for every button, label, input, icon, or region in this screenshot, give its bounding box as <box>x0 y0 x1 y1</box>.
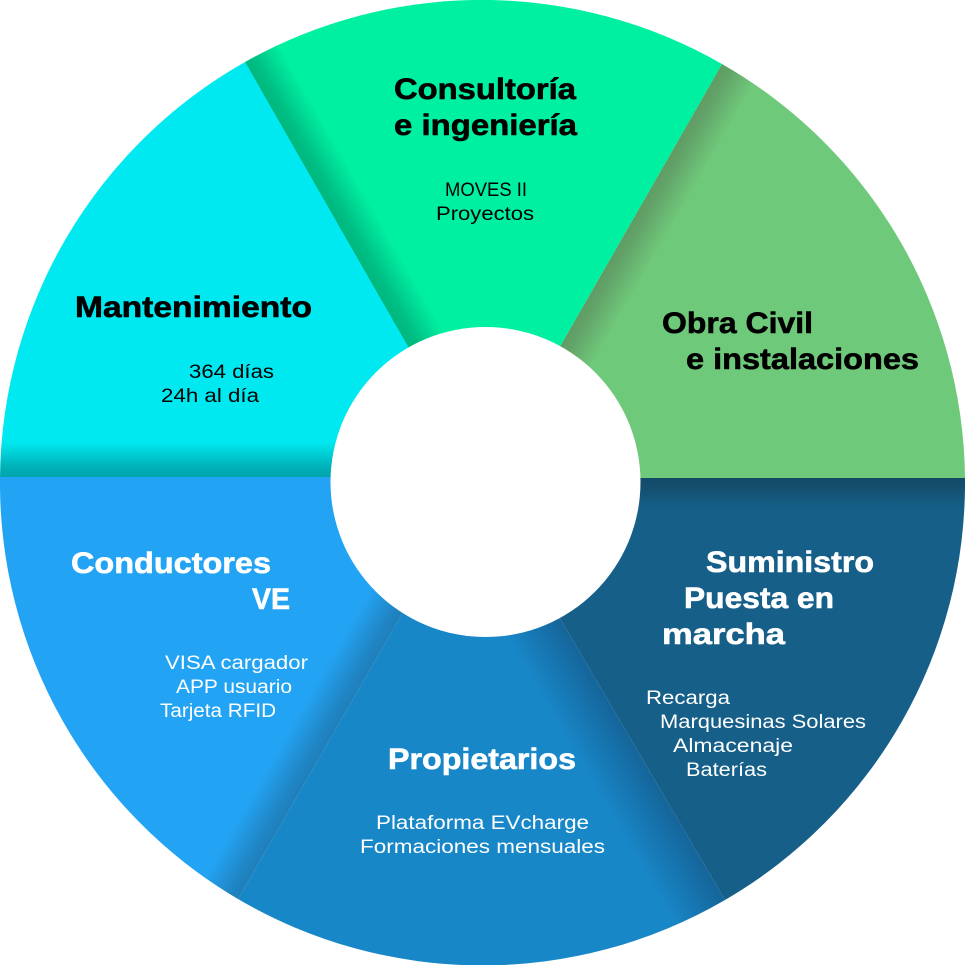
text: consultoría list: Proyectos <box>436 204 534 225</box>
panel: Conductores VE <box>0 477 484 899</box>
text: conductores list: Tarjeta RFID <box>160 701 276 722</box>
text: suministro list: Recarga <box>646 688 730 709</box>
heading: Consultoría e ingeniería: Consultoría <box>394 73 576 106</box>
heading: Suministro Puesta en marcha: Puesta en <box>684 582 834 615</box>
center circle <box>330 327 640 637</box>
heading: Obra Civil e instalaciones: e instalaciones <box>686 343 919 376</box>
heading: Mantenimiento: Mantenimiento <box>75 291 312 324</box>
text: conductores list: VISA cargador <box>165 653 309 674</box>
panel: Propietarios <box>238 480 725 965</box>
heading: Consultoría e ingeniería <box>394 73 577 142</box>
heading: Suministro Puesta en marcha: Suministro <box>706 546 874 579</box>
panel: Mantenimiento <box>0 62 484 477</box>
text: mantenimiento list: 24h al día <box>161 386 259 407</box>
text: suministro list <box>646 688 866 781</box>
text: propietarios list: Formaciones mensuales <box>360 837 605 858</box>
heading: Propietarios: Propietarios <box>388 743 576 776</box>
heading: Suministro Puesta en marcha: marcha <box>662 618 785 651</box>
heading: Obra Civil e instalaciones <box>662 307 919 376</box>
text: mantenimiento list: 364 días <box>189 362 274 383</box>
text: consultoría list <box>436 180 534 225</box>
text: conductores list: APP usuario <box>176 677 292 698</box>
text: conductores list <box>160 653 309 722</box>
heading: Suministro Puesta en marcha <box>662 546 874 651</box>
text: propietarios list <box>360 813 605 858</box>
panel: Obra Civil e instalaciones <box>484 64 965 479</box>
text: suministro list: Baterías <box>686 760 767 781</box>
text: consultoría list: MOVES II <box>445 180 527 201</box>
text: suministro list: Almacenaje <box>673 736 793 757</box>
heading: Obra Civil e instalaciones: Obra Civil <box>662 307 813 340</box>
panel: Suministro y puesta en marcha <box>479 478 965 900</box>
panel: Consultoría e ingeniería <box>245 0 722 479</box>
text: suministro list: Marquesinas Solares <box>660 712 866 733</box>
heading: Conductores VE: Conductores <box>71 547 271 580</box>
heading: Conductores VE <box>71 547 290 616</box>
text: propietarios list: Plataforma EVcharge <box>376 813 589 834</box>
heading: Conductores VE: VE <box>252 583 290 616</box>
text: mantenimiento list <box>161 362 274 407</box>
heading: Consultoría e ingeniería: e ingeniería <box>394 109 577 142</box>
